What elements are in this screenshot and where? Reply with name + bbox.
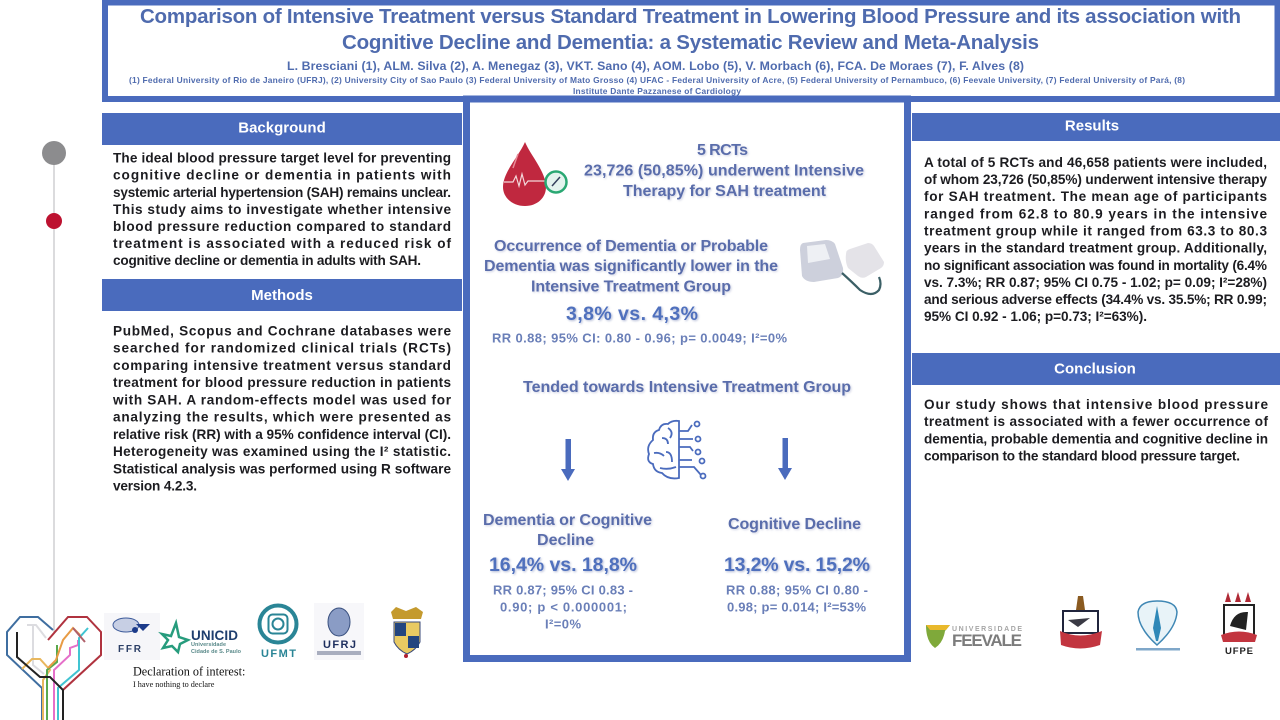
conclusion text: treatment is associated with a fewer occurrence of (924, 414, 1268, 429)
methods text (112, 324, 452, 494)
background text: treatment is associated with a reduced risk of (113, 236, 451, 251)
results text: 95% CI 0.92 - 1.06; p=0.73; I²=63%). (924, 309, 1147, 324)
outcome: cognitive decline: 13,2% vs. 15,2% (724, 554, 870, 576)
panel: results (912, 113, 1280, 324)
dementia finding heading: Occurrence of Dementia or Probable (494, 238, 768, 255)
results text: no significant association was found in mortality (6.4% (924, 258, 1267, 273)
results text: for SAH treatment. The mean age of participants (924, 189, 1267, 204)
logo: FFR: FFR (118, 644, 142, 655)
logo: UFRJ: UFRJ (323, 639, 356, 651)
title (140, 5, 1241, 54)
outcome: dementia or cognitive decline: RR 0.87; 95% CI 0.83 - (493, 582, 633, 598)
logo: Feevale (926, 625, 1022, 650)
conclusion text: Our study shows that intensive blood pressure (924, 397, 1268, 412)
outcome: dementia or cognitive decline (483, 512, 652, 632)
results text: and serious adverse effects (34.4% vs. 35.5%; RR 0.99; (924, 292, 1267, 307)
title: Comparison of Intensive Treatment versus Standard Treatment in Lowering Blood Pressure and its association with (140, 5, 1241, 28)
logo: UNICID: Universidade (191, 642, 226, 648)
methods text: PubMed, Scopus and Cochrane databases were (113, 324, 451, 338)
conclusion text: comparison to the standard blood pressure target. (924, 448, 1240, 464)
logo: UFMT (260, 606, 296, 660)
background text (113, 150, 451, 268)
icon: heart circuit logo (7, 617, 101, 720)
logo: UFPA (1060, 596, 1102, 648)
outcome: dementia or cognitive decline: 0.90; p < 0.000001; (500, 600, 627, 614)
affiliations: (1) Federal University of Rio de Janeiro (UFRJ), (2) University City of Sao Paulo (3) Federal University of Mato Grosso (4) UFAC - Federal University of Acre, (5) Federal University of Pernambuco, (6) Feevale University, (7) Federal University of Pará, (8) (129, 75, 1185, 85)
methods text: with SAH. A random-effects model was used for (112, 392, 452, 408)
title: Cognitive Decline and Dementia: a Systematic Review and Meta-Analysis (342, 31, 1039, 54)
outcome: cognitive decline: 0.98; p= 0.014; I²=53% (727, 600, 866, 614)
background text: blood pressure reduction compared to standard (113, 219, 451, 234)
outcome: cognitive decline: RR 0.88; 95% CI 0.80 - (726, 582, 868, 598)
logo: Dante Pazzanese (1136, 601, 1180, 650)
icon: blood drop with gauge (503, 142, 566, 206)
dementia result: 3,8% vs. 4,3% (566, 303, 698, 325)
summary text (584, 142, 864, 200)
dementia finding heading: Intensive Treatment Group (531, 278, 731, 296)
background text: cognitive decline or dementia in adults with SAH. (113, 253, 421, 268)
results text: years in the standard treatment group. Additionally, (924, 240, 1267, 256)
affiliations: Institute Dante Pazzanese of Cardiology (573, 86, 741, 96)
logo: UFAC (391, 607, 423, 658)
methods text: analyzing the results, which were presented as (113, 410, 451, 424)
outcome: dementia or cognitive decline: 16,4% vs. 18,8% (489, 554, 637, 576)
background text: systemic arterial hypertension (SAH) remains unclear. (113, 185, 451, 200)
outcome: cognitive decline (724, 516, 870, 614)
arrow: right down (778, 438, 792, 480)
declaration of interest (133, 664, 245, 689)
panel: background (102, 113, 462, 268)
methods text: Heterogeneity was examined using the I² statistic. (113, 444, 451, 459)
logo: UFPE (1221, 592, 1257, 657)
arrow: left down (561, 439, 575, 481)
heading: results: Results (1065, 118, 1119, 134)
background text: This study aims to investigate whether intensive (113, 202, 451, 217)
methods text: searched for randomized clinical trials (RCTs) (113, 340, 451, 356)
methods text: relative risk (RR) with a 95% confidence interval (CI). (113, 427, 451, 442)
results text: A total of 5 RCTs and 46,658 patients were included, (924, 155, 1267, 170)
results text: vs. 7.3%; RR 0.87; 95% CI 0.75 - 1.02; p= 0.09; I²=28%) (924, 275, 1267, 290)
logo: UNICID: Cidade de S. Paulo (191, 649, 242, 655)
methods text: Statistical analysis was performed using R software (113, 462, 451, 476)
declaration of interest: Declaration of interest: (133, 664, 245, 678)
methods text: version 4.2.3. (113, 478, 197, 494)
logo: UFRJ (314, 603, 364, 660)
logo: Feevale: UNIVERSIDADE (952, 626, 1022, 633)
conclusion text: dementia, probable dementia and cognitive decline in (924, 432, 1268, 446)
summary text: Therapy for SAH treatment (623, 183, 827, 200)
panel: central findings (466, 96, 908, 658)
logo: Feevale: FEEVALE (952, 631, 1022, 650)
outcome: dementia or cognitive decline: Decline (537, 532, 594, 549)
heading: background: Background (238, 120, 326, 136)
heading: methods (102, 279, 462, 311)
authors: L. Bresciani (1), ALM. Silva (2), A. Menegaz (3), VKT. Sano (4), AOM. Lobo (5), V. Morbach (6), FCA. De Moraes (7), F. Alves (8) (287, 59, 1024, 73)
background text: cognitive decline or dementia in patients with (113, 168, 451, 182)
heading: background (102, 113, 462, 145)
dementia statistics: RR 0.88; 95% CI: 0.80 - 0.96; p= 0.0049; I²=0% (492, 330, 787, 346)
outcome: dementia or cognitive decline: I²=0% (545, 616, 581, 632)
panel: conclusion (912, 353, 1280, 464)
dementia finding heading (484, 238, 778, 296)
conclusion text (924, 397, 1268, 464)
panel: methods (102, 279, 462, 494)
summary text: 23,726 (50,85%) underwent Intensive (584, 162, 864, 180)
background text: The ideal blood pressure target level for preventing (113, 150, 451, 166)
declaration of interest: I have nothing to declare (133, 680, 215, 689)
logo: UNICID (162, 623, 242, 655)
header panel (105, 2, 1278, 99)
dementia finding heading: Dementia was significantly lower in the (484, 258, 778, 275)
methods text: treatment for blood pressure reduction in patients (113, 375, 451, 390)
icon: brain with circuits (648, 421, 706, 478)
results text: ranged from 62.8 to 80.9 years in the intensive (924, 206, 1267, 222)
logo: FFR (104, 613, 160, 660)
outcome: dementia or cognitive decline: Dementia or Cognitive (483, 512, 652, 529)
methods text: comparing intensive treatment versus standard (113, 358, 451, 373)
logo: UFPE: UFPE (1225, 646, 1253, 657)
heading: conclusion: Conclusion (1054, 360, 1136, 378)
results text: treatment group while it ranged from 63.3 to 80.3 (924, 224, 1267, 238)
summary text: 5 RCTs (697, 142, 748, 159)
heading: conclusion (912, 353, 1280, 385)
logo: UNICID: UNICID (191, 628, 238, 643)
results text (924, 155, 1267, 324)
outcome: cognitive decline: Cognitive Decline (728, 516, 861, 533)
heading: results (912, 113, 1280, 141)
icon: blood pressure monitor (800, 240, 884, 294)
affiliations (129, 75, 1185, 96)
logo: UFMT: UFMT (261, 648, 296, 660)
results text: of whom 23,726 (50,85%) underwent intensive therapy (924, 172, 1267, 187)
timeline decoration (42, 141, 66, 632)
heading: methods: Methods (251, 287, 313, 304)
tended heading: Tended towards Intensive Treatment Group (523, 379, 851, 396)
